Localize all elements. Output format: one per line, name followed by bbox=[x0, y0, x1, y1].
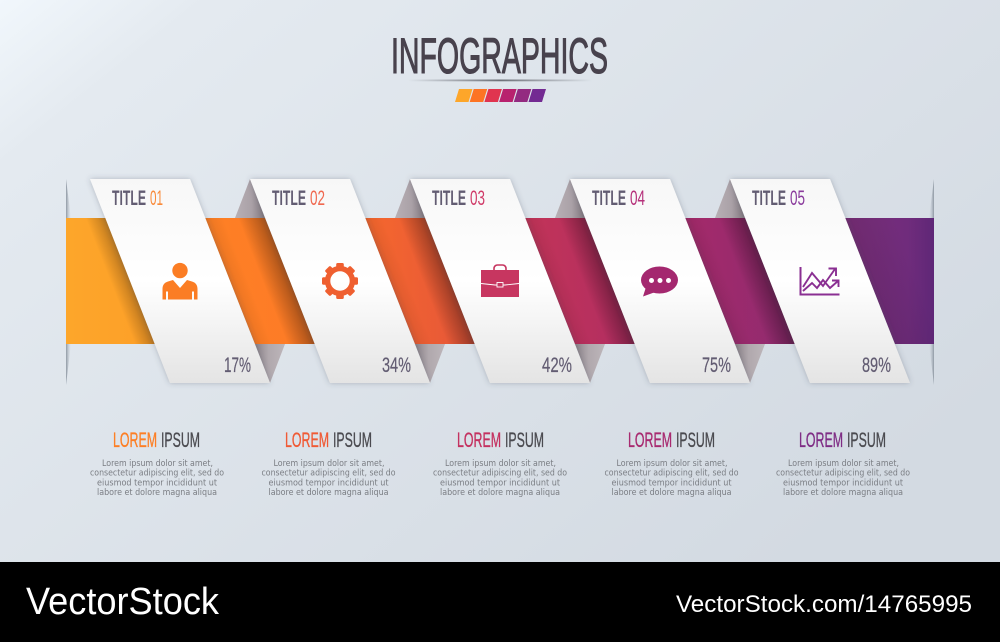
heading 2: IPSUM bbox=[333, 429, 372, 452]
panel 2 percent: 34% bbox=[382, 354, 411, 377]
heading 4: LOREM bbox=[628, 429, 672, 452]
panel 3 percent: 42% bbox=[542, 354, 572, 377]
panel 1 bbox=[90, 179, 270, 383]
body 1: eiusmod tempor incididunt ut bbox=[97, 478, 217, 488]
heading 1: LOREM bbox=[113, 429, 157, 452]
body 2: Lorem ipsum dolor sit amet, bbox=[274, 459, 384, 469]
panel 4 title: 04 bbox=[630, 187, 645, 210]
body 5: consectetur adipiscing elit, sed do bbox=[776, 468, 910, 478]
icon: briefcase bbox=[481, 265, 519, 297]
body 1 bbox=[90, 459, 224, 498]
body 5: Lorem ipsum dolor sit amet, bbox=[788, 459, 899, 469]
body 3: consectetur adipiscing elit, sed do bbox=[433, 468, 567, 478]
body 2: labore et dolore magna aliqua bbox=[268, 488, 388, 498]
panel 5 bbox=[730, 179, 910, 383]
panel 4 percent: 75% bbox=[702, 354, 731, 377]
heading 5: LOREM bbox=[799, 429, 843, 452]
body 2: consectetur adipiscing elit, sed do bbox=[262, 468, 396, 478]
body 3: Lorem ipsum dolor sit amet, bbox=[445, 459, 556, 469]
body 1: labore et dolore magna aliqua bbox=[97, 488, 217, 498]
heading 2: LOREM bbox=[285, 429, 329, 452]
body 2 bbox=[262, 459, 396, 498]
panel 4 bbox=[570, 179, 750, 383]
fold triangles bbox=[235, 179, 765, 383]
heading 1: IPSUM bbox=[161, 429, 200, 452]
ribbon band bbox=[66, 218, 934, 344]
title underline bbox=[408, 80, 592, 81]
heading 5: IPSUM bbox=[847, 429, 886, 452]
body 1: consectetur adipiscing elit, sed do bbox=[90, 468, 224, 478]
body 3: labore et dolore magna aliqua bbox=[440, 488, 560, 498]
body 4: Lorem ipsum dolor sit amet, bbox=[616, 459, 728, 469]
footer bar bbox=[0, 562, 1000, 642]
panel 3 bbox=[410, 179, 590, 383]
icon: line chart bbox=[800, 267, 840, 294]
text block 1 bbox=[90, 429, 224, 498]
panel 5 title: 05 bbox=[790, 187, 805, 210]
panel 2 bbox=[250, 179, 430, 383]
text block 5 bbox=[776, 429, 910, 498]
body 5: eiusmod tempor incididunt ut bbox=[783, 478, 903, 488]
body 3: eiusmod tempor incididunt ut bbox=[440, 478, 560, 488]
footer logo: VectorStock bbox=[26, 581, 220, 623]
panel 5 percent: 89% bbox=[862, 354, 891, 377]
panel 5 title: TITLE bbox=[752, 187, 786, 210]
panel 1 title: 01 bbox=[150, 187, 163, 210]
end caps bbox=[66, 179, 934, 385]
icon: gear bbox=[322, 263, 358, 299]
colour swatches bbox=[455, 89, 546, 102]
footer url: VectorStock.com/14765995 bbox=[676, 591, 972, 618]
body 4: consectetur adipiscing elit, sed do bbox=[604, 468, 738, 478]
text block 3 bbox=[433, 429, 567, 498]
body 1: Lorem ipsum dolor sit amet, bbox=[102, 459, 213, 469]
panel 4 title: TITLE bbox=[592, 187, 626, 210]
panel 1 title: TITLE bbox=[112, 187, 146, 210]
heading 3: LOREM bbox=[457, 429, 501, 452]
body 4: labore et dolore magna aliqua bbox=[612, 488, 732, 498]
body 4: eiusmod tempor incididunt ut bbox=[612, 478, 732, 488]
text block 2 bbox=[262, 429, 396, 498]
panel 1 percent: 17% bbox=[224, 354, 251, 377]
body 3 bbox=[433, 459, 567, 498]
heading 3: IPSUM bbox=[505, 429, 544, 452]
panel 2 title: 02 bbox=[310, 187, 325, 210]
body 5 bbox=[776, 459, 910, 498]
body 5: labore et dolore magna aliqua bbox=[783, 488, 903, 498]
panel 3 title: TITLE bbox=[432, 187, 466, 210]
title: INFOGRAPHICS bbox=[391, 28, 608, 84]
icon: person bbox=[162, 263, 198, 300]
icon: speech bubble bbox=[641, 266, 678, 296]
body 4 bbox=[604, 459, 738, 498]
heading 4: IPSUM bbox=[676, 429, 715, 452]
panel 2 title: TITLE bbox=[272, 187, 306, 210]
panel 3 title: 03 bbox=[470, 187, 485, 210]
text block 4 bbox=[604, 429, 738, 498]
body 2: eiusmod tempor incididunt ut bbox=[268, 478, 389, 488]
